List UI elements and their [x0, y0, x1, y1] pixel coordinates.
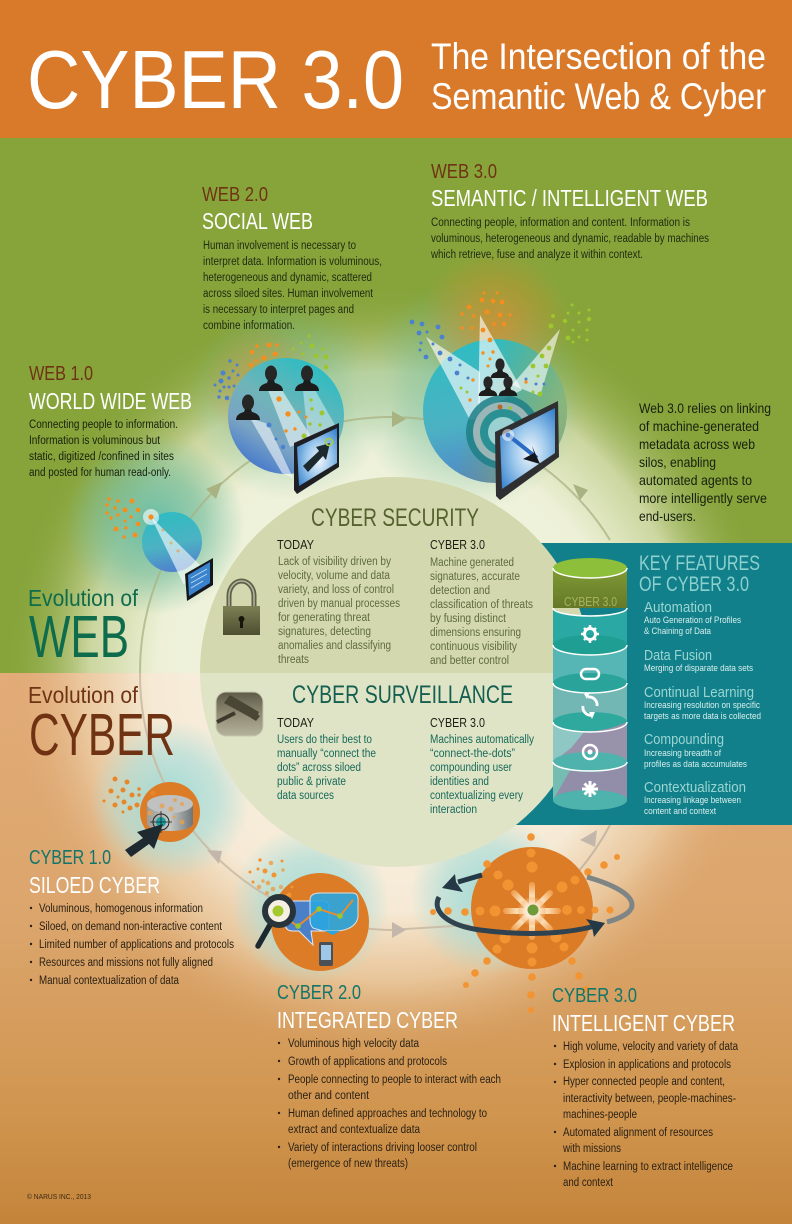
Web 1.0 heading and text — [29, 363, 192, 479]
Cyber 3.0 heading and bullets: Automated alignment of resources — [563, 1127, 713, 1139]
panel: cyber surveillance: identities and — [430, 776, 489, 788]
panel: key features text: Increasing breadth of — [644, 748, 721, 759]
Web 2.0 heading and text — [202, 184, 382, 332]
panel: key features text: Automation — [644, 600, 712, 616]
panel: key features text: Data Fusion — [644, 648, 712, 664]
icon: web 3.0 globe with beams, rings and tablet — [410, 292, 591, 500]
Cyber 3.0 heading and bullets: with missions — [562, 1143, 621, 1155]
Cyber 1.0 heading and bullets: Resources and missions not fully aligned — [39, 957, 213, 969]
icon: web 2.0 globe with people and tablet — [214, 334, 344, 494]
panel: cyber security: driven by manual processes — [278, 598, 400, 610]
cylinder: key features stack — [553, 558, 627, 810]
icon: gear — [581, 625, 599, 643]
Web 2.0 heading and text: is necessary to interpret pages and — [203, 304, 354, 316]
Web 3.0 side note: automated agents to — [639, 472, 752, 488]
panel: cyber security: variety, and loss of control — [278, 584, 394, 596]
copyright: © NARUS INC., 2013 — [27, 1193, 91, 1201]
Web 2.0 heading and text: WEB 2.0 — [202, 184, 268, 206]
Cyber 3.0 heading and bullets: interactivity between, people-machines- — [563, 1093, 736, 1105]
panel: key features background — [510, 543, 792, 825]
Evolution of WEB label: WEB — [29, 604, 129, 670]
panel: cyber surveillance: public & private — [277, 776, 346, 788]
Cyber 2.0 heading and bullets: extract and contextualize data — [288, 1124, 421, 1136]
panel: cyber surveillance: contextualizing every — [430, 790, 523, 802]
Evolution of CYBER label — [28, 682, 175, 768]
background: green web zone — [0, 138, 792, 673]
background: peach cyber zone — [0, 673, 792, 1224]
Web 3.0 heading and text: Connecting people, information and content. Information is — [431, 217, 690, 229]
Web 3.0 heading and text: WEB 3.0 — [431, 161, 497, 183]
panel: key features text: Continual Learning — [644, 685, 754, 701]
Cyber 1.0 heading and bullets: Siloed, on demand non-interactive content — [39, 921, 223, 933]
Cyber 2.0 heading and bullets: Human defined approaches and technology to — [288, 1108, 487, 1120]
panel: key features text: Compounding — [644, 732, 724, 748]
panel: cyber security: detection and — [430, 585, 490, 597]
panel: cyber surveillance: CYBER 3.0 — [430, 715, 485, 730]
icon: cycle arrows — [583, 692, 597, 719]
Web 3.0 heading and text — [430, 161, 709, 261]
panel: cyber surveillance: CYBER SURVEILLANCE — [292, 681, 513, 709]
Web 1.0 heading and text: static, digitized /confined in sites — [29, 451, 174, 463]
Web 2.0 heading and text: across siloed sites. Human involvement — [203, 288, 374, 300]
icon: surveillance camera — [216, 692, 263, 736]
Evolution of CYBER label: Evolution of — [28, 682, 139, 708]
Evolution of CYBER label: CYBER — [29, 702, 175, 768]
Web 3.0 side note: end-users. — [639, 508, 696, 524]
panel: cyber surveillance: Machines automatically — [430, 734, 534, 746]
panel: cyber security: signatures, accurate — [430, 571, 520, 583]
panel: cyber security: for generating threat — [278, 612, 371, 624]
panel: cyber security: and better control — [430, 655, 509, 667]
panel: cyber security: dimensions ensuring — [430, 627, 521, 639]
panel: cyber security: continuous visibility — [430, 641, 517, 653]
Web 2.0 heading and text: SOCIAL WEB — [202, 208, 313, 234]
icon: target — [583, 745, 597, 759]
Cyber 3.0 heading and bullets: and context — [563, 1177, 614, 1189]
central circle: security half — [200, 477, 582, 673]
panel: cyber surveillance: manually “connect the — [277, 748, 376, 760]
evolution ring with arrows — [140, 411, 610, 938]
Cyber 2.0 heading and bullets: other and content — [288, 1090, 370, 1102]
cylinder: key features stack: CYBER 3.0 — [564, 594, 617, 609]
panel: key features text: profiles as data accumulates — [644, 759, 747, 770]
Web 3.0 heading and text: voluminous, heterogeneous and dynamic, readable by machines — [431, 233, 709, 245]
Cyber 3.0 heading and bullets: INTELLIGENT CYBER — [552, 1010, 735, 1036]
Web 3.0 side note: of machine-generated — [639, 418, 759, 434]
Cyber 3.0 heading and bullets: Explosion in applications and protocols — [563, 1059, 731, 1071]
Cyber 3.0 heading and bullets: High volume, velocity and variety of data — [563, 1041, 739, 1053]
panel: cyber surveillance: compounding user — [430, 762, 512, 774]
panel: cyber surveillance — [277, 681, 534, 816]
glow: upper central — [30, 311, 727, 673]
panel: cyber security: classification of threats — [430, 599, 533, 611]
Cyber 2.0 heading and bullets: People connecting to people to interact with each — [288, 1074, 501, 1086]
Web 3.0 heading and text: which retrieve, fuse and analyze it within context. — [430, 249, 643, 261]
Cyber 1.0 heading and bullets: CYBER 1.0 — [29, 847, 111, 869]
Web 1.0 heading and text: Information is voluminous but — [29, 435, 161, 447]
Web 1.0 heading and text: and posted for human read-only. — [29, 467, 171, 479]
Web 3.0 side note: silos, enabling — [639, 454, 716, 470]
icon: fusion loops — [581, 669, 599, 679]
panel: key features text: Increasing linkage between — [644, 795, 741, 806]
icon: cyber 1.0 database — [102, 776, 200, 857]
central circle: surveillance half — [200, 673, 553, 867]
icon: cyber 2.0 chat and magnifier — [248, 858, 369, 971]
Evolution of WEB label: Evolution of — [28, 585, 139, 611]
Web 3.0 side note — [639, 400, 771, 524]
panel: cyber security — [277, 504, 533, 667]
Cyber 3.0 heading and bullets — [552, 985, 739, 1189]
Cyber 1.0 heading and bullets: SILOED CYBER — [29, 872, 160, 898]
icon: padlock — [223, 581, 260, 635]
panel: cyber security: by fusing distinct — [430, 613, 507, 625]
Web 1.0 heading and text: WEB 1.0 — [29, 363, 93, 385]
panel: cyber security: Lack of visibility driven by — [278, 556, 391, 568]
panel: cyber security: TODAY — [277, 537, 314, 552]
Cyber 3.0 heading and bullets: machines-people — [563, 1109, 637, 1121]
icon: burst — [582, 781, 598, 797]
Web 1.0 heading and text: Connecting people to information. — [29, 419, 178, 431]
panel: cyber security: CYBER 3.0 — [430, 537, 485, 552]
panel: cyber security: Machine generated — [430, 557, 514, 569]
panel: key features text: Auto Generation of Profiles — [644, 615, 741, 626]
Cyber 1.0 heading and bullets: Limited number of applications and protocols — [39, 939, 234, 951]
panel: cyber security: CYBER SECURITY — [311, 504, 479, 532]
glow: lower central — [44, 673, 705, 1034]
panel: cyber security: threats — [278, 654, 309, 666]
panel: cyber security: anomalies and classifying — [278, 640, 391, 652]
Cyber 2.0 heading and bullets: Growth of applications and protocols — [288, 1056, 447, 1068]
Cyber 2.0 heading and bullets — [277, 982, 501, 1170]
Cyber 1.0 heading and bullets — [29, 847, 234, 987]
halos behind icons — [65, 250, 585, 985]
Cyber 2.0 heading and bullets: (emergence of new threats) — [288, 1158, 408, 1170]
Web 3.0 side note: metadata across web — [639, 436, 755, 452]
panel: key features text: OF CYBER 3.0 — [639, 573, 749, 596]
panel: cyber surveillance: Users do their best to — [277, 734, 372, 746]
Web 2.0 heading and text: interpret data. Information is voluminous, — [203, 256, 382, 268]
panel: cyber surveillance: dots” across siloed — [277, 762, 361, 774]
Web 3.0 heading and text: SEMANTIC / INTELLIGENT WEB — [431, 185, 708, 211]
Web 2.0 heading and text: combine information. — [203, 320, 295, 332]
panel: cyber surveillance: “connect-the-dots” — [430, 748, 515, 760]
Cyber 3.0 heading and bullets: CYBER 3.0 — [552, 985, 637, 1007]
panel: key features text: Increasing resolution on specific — [644, 700, 760, 711]
Cyber 2.0 heading and bullets: Variety of interactions driving looser control — [288, 1142, 477, 1154]
Web 1.0 heading and text: WORLD WIDE WEB — [29, 388, 192, 414]
panel: key features text: Merging of disparate data sets — [644, 663, 753, 674]
subtitle: The Intersection of the — [431, 36, 766, 77]
panel: cyber security: signatures, detecting — [278, 626, 371, 638]
panel: cyber surveillance: interaction — [430, 804, 477, 816]
Web 2.0 heading and text: Human involvement is necessary to — [203, 240, 356, 252]
icon: web 1.0 globe and tablet — [105, 497, 213, 601]
title: CYBER 3.0 — [27, 33, 404, 126]
Cyber 1.0 heading and bullets: Manual contextualization of data — [39, 975, 180, 987]
Cyber 3.0 heading and bullets: Hyper connected people and content, — [563, 1076, 725, 1088]
panel: key features text: content and context — [644, 806, 716, 817]
Web 3.0 side note: more intelligently serve — [639, 490, 767, 506]
panel: key features text — [639, 552, 761, 817]
Cyber 2.0 heading and bullets: INTEGRATED CYBER — [277, 1007, 458, 1033]
Cyber 2.0 heading and bullets: CYBER 2.0 — [277, 982, 361, 1004]
header band — [0, 0, 792, 138]
Web 2.0 heading and text: heterogeneous and dynamic, scattered — [203, 272, 372, 284]
panel: cyber security: velocity, volume and data — [278, 570, 391, 582]
panel: key features text: targets as more data is collected — [644, 711, 761, 722]
panel: key features text: Contextualization — [644, 780, 746, 796]
panel: cyber surveillance: data sources — [277, 790, 334, 802]
panel: key features text: & Chaining of Data — [644, 626, 712, 637]
panel: cyber surveillance: TODAY — [277, 715, 314, 730]
Cyber 2.0 heading and bullets: Voluminous high velocity data — [288, 1038, 420, 1050]
icon: cyber 3.0 sphere with orbit — [430, 833, 632, 1013]
Cyber 1.0 heading and bullets: Voluminous, homogenous information — [39, 903, 203, 915]
Evolution of WEB label — [28, 585, 139, 670]
subtitle — [431, 36, 766, 117]
Web 3.0 side note: Web 3.0 relies on linking — [639, 400, 771, 416]
Cyber 3.0 heading and bullets: Machine learning to extract intelligence — [563, 1161, 733, 1173]
